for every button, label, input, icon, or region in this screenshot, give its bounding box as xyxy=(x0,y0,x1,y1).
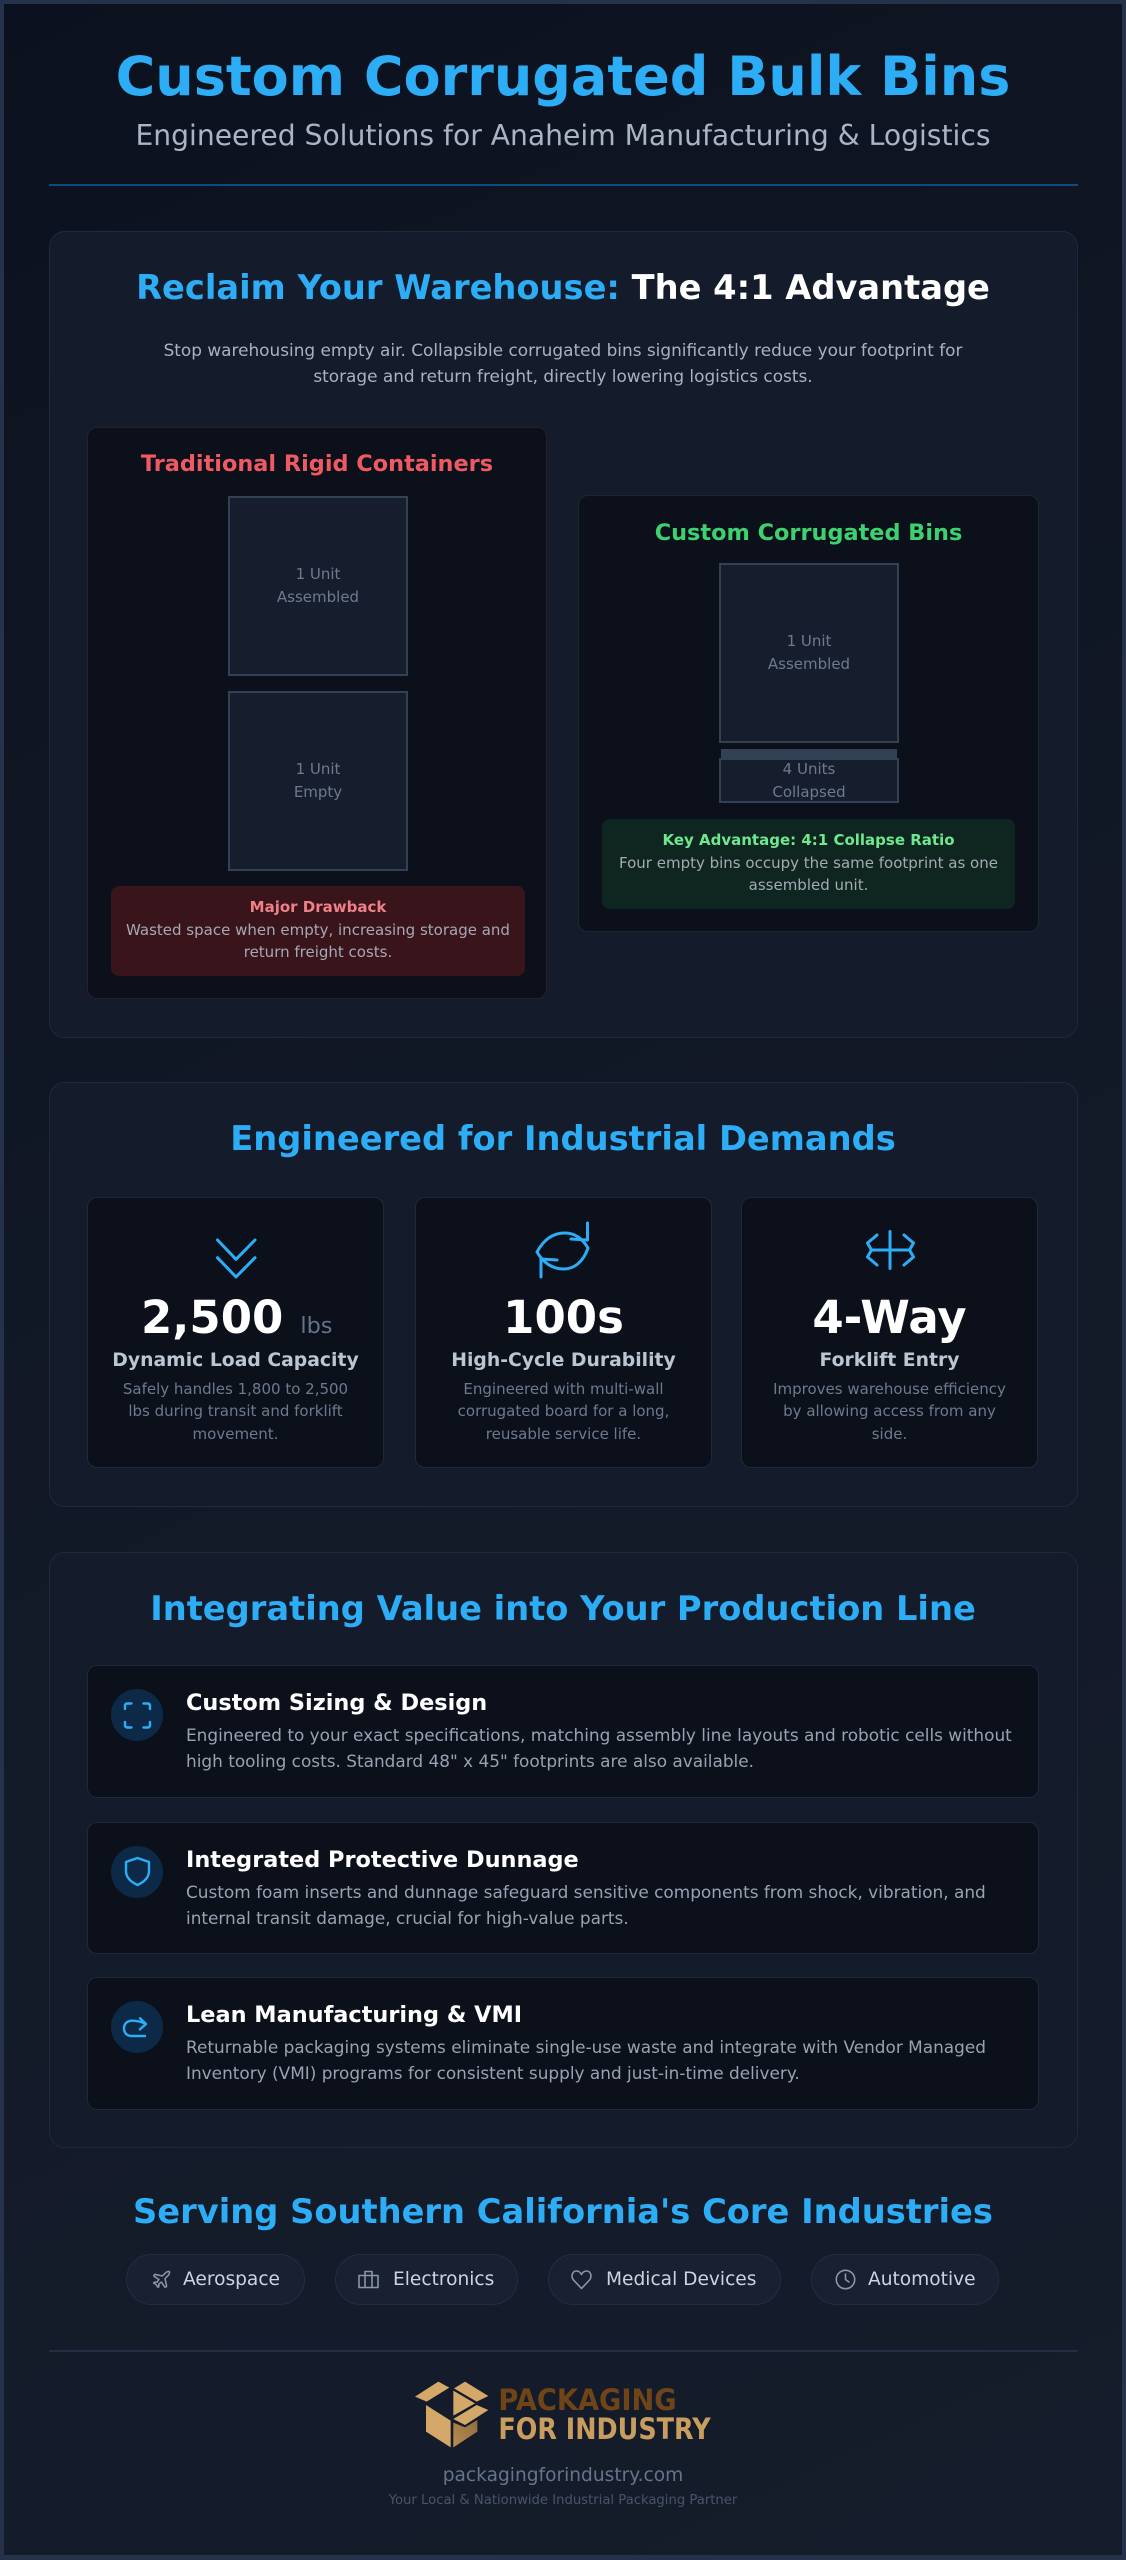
item description: Inventory (VMI) programs for consistent supply and just-in-time delivery. xyxy=(186,2063,800,2083)
stat description xyxy=(458,1380,669,1443)
callout: major drawback xyxy=(111,886,525,976)
heading: reclaim your warehouse: Reclaim Your Warehouse: The 4:1 Advantage xyxy=(136,268,990,306)
stat description xyxy=(123,1380,348,1443)
bin: assembled xyxy=(228,496,408,676)
stat description: Safely handles 1,800 to 2,500 xyxy=(123,1380,348,1398)
item description xyxy=(186,2037,986,2083)
heading: custom bins: Custom Corrugated Bins xyxy=(655,520,962,546)
panel: custom corrugated bins xyxy=(578,495,1039,932)
bin: collapsed: Collapsed xyxy=(772,782,846,800)
callout: major drawback: return freight costs. xyxy=(244,943,392,961)
item description xyxy=(186,1725,1012,1771)
icon: briefcase xyxy=(358,2270,379,2288)
icon: cycle arrows xyxy=(535,1222,590,1278)
callout: key advantage xyxy=(602,819,1015,909)
item title: Lean Manufacturing & VMI xyxy=(186,2002,522,2028)
stat description: Engineered with multi-wall xyxy=(463,1380,664,1398)
bin: empty xyxy=(228,691,408,871)
stat description xyxy=(773,1380,1006,1443)
bin: empty: Empty xyxy=(294,783,342,801)
stat value: 2,500 lbs xyxy=(141,1291,332,1344)
heading: integrating value: Integrating Value into Your Production Line xyxy=(150,1589,976,1628)
bin: empty: 1 Unit xyxy=(296,760,340,778)
stat label: Dynamic Load Capacity xyxy=(112,1350,359,1371)
item title: Custom Sizing & Design xyxy=(186,1690,487,1716)
footer url: packagingforindustry.com xyxy=(443,2465,683,2486)
collapsed stack bar xyxy=(721,749,897,760)
panel: traditional rigid containers xyxy=(87,427,547,999)
heading: core industries: Serving Southern California's Core Industries xyxy=(133,2192,993,2231)
stat description: Improves warehouse efficiency xyxy=(773,1380,1006,1398)
stat value: 4-Way xyxy=(812,1291,967,1344)
pill: aerospace xyxy=(126,2254,305,2305)
callout: major drawback: Wasted space when empty, increasing storage and xyxy=(126,921,510,939)
icon: sizing frame xyxy=(111,1689,163,1741)
icon: heart xyxy=(571,2270,592,2290)
item title: Integrated Protective Dunnage xyxy=(186,1847,579,1873)
icon: clock xyxy=(836,2270,856,2290)
logo: packaging for industry xyxy=(415,2382,711,2448)
stat description: movement. xyxy=(193,1425,278,1443)
item description: internal transit damage, crucial for high-value parts. xyxy=(186,1908,629,1928)
bin: assembled xyxy=(719,563,899,743)
heading: engineered for industrial demands: Engineered for Industrial Demands xyxy=(230,1119,896,1158)
item: custom sizing xyxy=(87,1665,1039,1798)
label: aerospace: Aerospace xyxy=(183,2269,280,2290)
label: automotive: Automotive xyxy=(868,2269,976,2290)
panel: 4:1 advantage xyxy=(49,231,1078,1038)
callout: key advantage: assembled unit. xyxy=(749,876,868,894)
stat label: High-Cycle Durability xyxy=(451,1350,676,1371)
icon: chevrons down xyxy=(216,1238,257,1279)
pill: automotive xyxy=(811,2254,999,2305)
item: lean manufacturing xyxy=(87,1977,1039,2110)
item description: Returnable packaging systems eliminate single-use waste and integrate with Vendor Managed xyxy=(186,2037,986,2057)
pill: medical devices xyxy=(548,2254,781,2305)
item description xyxy=(186,1882,986,1928)
heading: traditional: Traditional Rigid Containers xyxy=(141,451,493,477)
item description: Engineered to your exact specifications, matching assembly line layouts and robotic cells without xyxy=(186,1725,1012,1745)
stat card: durability xyxy=(415,1197,712,1468)
stat card: forklift entry xyxy=(741,1197,1038,1468)
panel: industrial demands xyxy=(49,1082,1078,1507)
logo: packaging for industry: FOR INDUSTRY xyxy=(498,2411,711,2446)
intro text xyxy=(164,340,962,386)
callout: key advantage: Key Advantage: 4:1 Collapse Ratio xyxy=(662,831,955,849)
stat label: Forklift Entry xyxy=(820,1350,959,1371)
callout: key advantage: Four empty bins occupy the same footprint as one xyxy=(619,854,998,872)
item description: Custom foam inserts and dunnage safeguard sensitive components from shock, vibration, and xyxy=(186,1882,986,1902)
stat description: by allowing access from any xyxy=(783,1402,996,1420)
label: electronics: Electronics xyxy=(393,2269,494,2290)
icon: plane xyxy=(152,2270,170,2288)
panel: production line xyxy=(49,1552,1078,2148)
bin: collapsed xyxy=(719,758,899,803)
item description: high tooling costs. Standard 48" x 45" footprints are also available. xyxy=(186,1751,754,1771)
stat description: side. xyxy=(872,1425,907,1443)
intro text: Stop warehousing empty air. Collapsible corrugated bins significantly reduce your footprint for xyxy=(164,340,962,360)
icon: four-way arrows xyxy=(866,1230,915,1270)
stat card: load capacity xyxy=(87,1197,384,1468)
subtitle: Engineered Solutions for Anaheim Manufacturing & Logistics xyxy=(135,119,991,152)
bin: collapsed: 4 Units xyxy=(783,760,835,778)
label: medical devices: Medical Devices xyxy=(606,2269,756,2290)
bin: assembled: Assembled xyxy=(277,588,359,606)
logo: packaging for industry: PACKAGING xyxy=(498,2382,677,2417)
icon: return arrow xyxy=(111,2001,163,2053)
bin: assembled: Assembled xyxy=(768,655,850,673)
pill: electronics xyxy=(335,2254,518,2305)
icon: shield xyxy=(111,1846,163,1898)
stat description: corrugated board for a long, xyxy=(458,1402,669,1420)
item: protective dunnage xyxy=(87,1822,1039,1954)
bin: assembled: 1 Unit xyxy=(787,632,831,650)
callout: major drawback: Major Drawback xyxy=(250,898,386,916)
intro text: storage and return freight, directly lowering logistics costs. xyxy=(313,366,813,386)
bin: assembled: 1 Unit xyxy=(296,565,340,583)
footer tagline: Your Local & Nationwide Industrial Packaging Partner xyxy=(389,2493,737,2508)
title: Custom Corrugated Bulk Bins xyxy=(116,45,1010,108)
stat description: reusable service life. xyxy=(486,1425,641,1443)
stat value: 100s xyxy=(503,1291,624,1344)
stat description: lbs during transit and forklift xyxy=(128,1402,343,1420)
